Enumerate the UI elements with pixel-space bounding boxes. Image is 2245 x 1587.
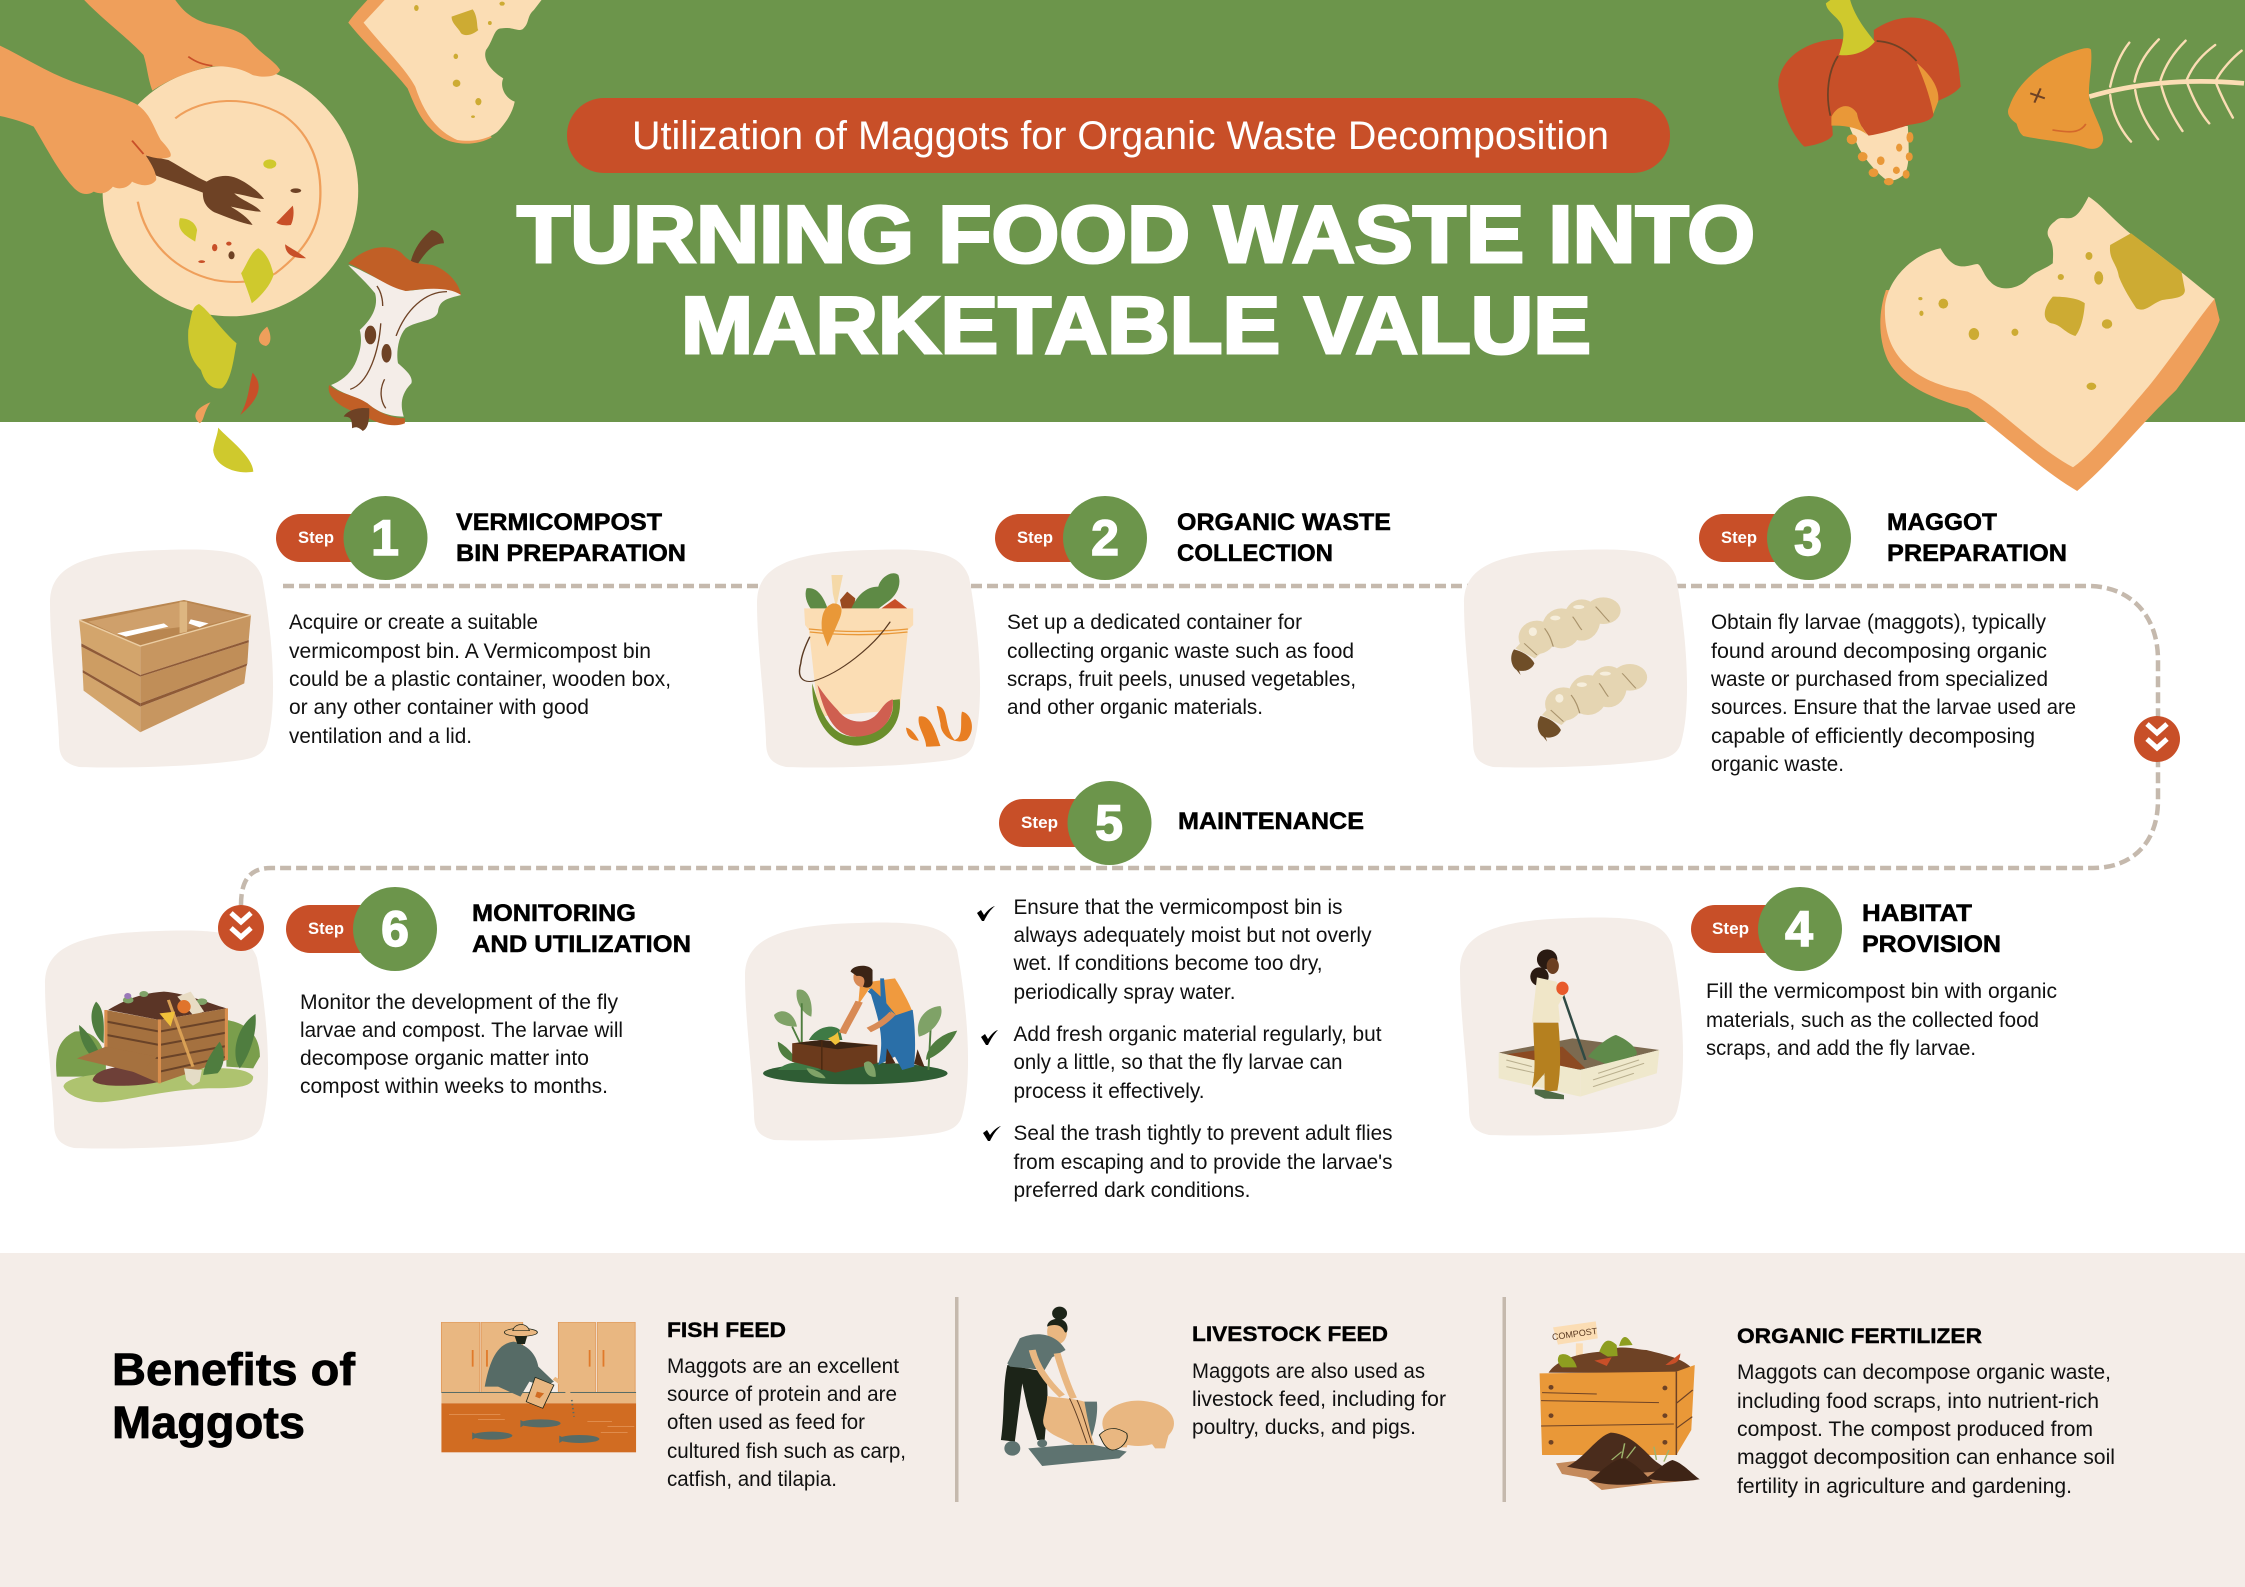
badge: step 4: 4 xyxy=(1785,901,1813,957)
heading: step 6 xyxy=(472,900,691,958)
text: organic fertilizer body: including food scraps, into nutrient-rich xyxy=(1737,1390,2099,1413)
page background band: benefits xyxy=(0,1253,2245,1587)
text: livestock feed body: Maggots are also used as xyxy=(1192,1360,1425,1383)
badge: step 5 xyxy=(999,781,1152,865)
badge: step 3: Step xyxy=(1721,528,1757,547)
panel: step 5 xyxy=(745,781,1392,1202)
heading: step 3: MAGGOT xyxy=(1887,509,1997,536)
text: step 3 body xyxy=(1710,611,2076,776)
heading: step 4 xyxy=(1862,900,2001,958)
text: step 2 body: Set up a dedicated container for xyxy=(1007,611,1302,634)
checklist: step 5: Add fresh organic material regularly, but xyxy=(1014,1023,1382,1046)
icon: check 3 xyxy=(983,1126,1001,1141)
text: step 3 body: capable of efficiently decomposing xyxy=(1711,725,2035,748)
text: step 6 body: decompose organic matter into xyxy=(300,1047,589,1070)
badge: step 3 xyxy=(1699,496,1851,580)
text: fish feed body: source of protein and are xyxy=(667,1383,897,1406)
badge: step 3: 3 xyxy=(1794,510,1822,566)
icon: check 1 xyxy=(977,906,995,921)
text: step 6 body: Monitor the development of the fly xyxy=(300,991,619,1014)
heading: step 4: HABITAT xyxy=(1862,900,1972,927)
panel: fish feed xyxy=(441,1319,906,1491)
icon: man feeding fish xyxy=(441,1322,636,1452)
text: livestock feed body: livestock feed, including for xyxy=(1192,1388,1446,1411)
checklist: step 5: wet. If conditions become too dry, xyxy=(1013,952,1322,975)
text: step 1 body xyxy=(289,611,671,748)
text: step 1 body: Acquire or create a suitable xyxy=(289,611,538,634)
badge: step 1: 1 xyxy=(371,510,399,566)
heading: step 2: ORGANIC WASTE xyxy=(1177,509,1391,536)
badge: step 2: 2 xyxy=(1091,510,1119,566)
heading: step 1 xyxy=(456,509,686,567)
checklist: step 5: preferred dark conditions. xyxy=(1014,1179,1250,1202)
icon: woman with compost bed xyxy=(1499,949,1659,1099)
text: step 2 body xyxy=(1007,611,1356,719)
icon: compost bin in garden xyxy=(56,991,260,1102)
heading: step 4: PROVISION xyxy=(1862,931,2001,958)
illustration: large bitten bread xyxy=(1880,197,2220,491)
heading: step 1: BIN PREPARATION xyxy=(456,540,686,567)
icon: maggots xyxy=(1511,597,1647,742)
chevron: step 3 to 4 xyxy=(2134,716,2180,762)
header band xyxy=(0,0,2245,422)
title xyxy=(517,190,1755,371)
checklist: step 5: periodically spray water. xyxy=(1014,981,1236,1004)
text: step 6 body: larvae and compost. The larvae will xyxy=(300,1019,623,1042)
text: organic fertilizer body: Maggots can decompose organic waste, xyxy=(1737,1361,2111,1384)
text: organic fertilizer body: compost. The compost produced from xyxy=(1737,1418,2093,1441)
illustration: hands holding plate with fork xyxy=(0,0,358,472)
heading: fish feed: FISH FEED xyxy=(667,1319,786,1342)
icon: food waste bucket xyxy=(799,573,972,747)
heading: step 5: MAINTENANCE xyxy=(1178,808,1364,835)
text: fish feed body: Maggots are an excellent xyxy=(667,1355,899,1378)
checklist: step 5: Seal the trash tightly to prevent adult flies xyxy=(1014,1122,1392,1145)
heading: step 3 xyxy=(1887,509,2067,567)
icon: check 2 xyxy=(981,1030,998,1045)
illustration: fish skeleton xyxy=(2008,39,2244,149)
badge: step 5: Step xyxy=(1021,813,1058,832)
title: MARKETABLE VALUE xyxy=(681,281,1591,371)
subtitle pill: Utilization of Maggots for Organic Waste Decomposition xyxy=(632,114,1609,158)
illustration: bitten bread top xyxy=(348,0,542,144)
label: compost sign: COMPOST xyxy=(1551,1326,1598,1342)
badge: step 4 xyxy=(1691,887,1842,971)
panel: step 2 xyxy=(757,496,1391,768)
text: step 4 body: materials, such as the collected food xyxy=(1706,1009,2039,1032)
icon: woman feeding pig xyxy=(1001,1307,1174,1466)
text: step 6 body: compost within weeks to months. xyxy=(300,1075,608,1098)
text: step 4 body: Fill the vermicompost bin with organic xyxy=(1706,980,2057,1003)
text: fish feed body: catfish, and tilapia. xyxy=(667,1468,837,1491)
heading: organic fertilizer: ORGANIC FERTILIZER xyxy=(1737,1325,1982,1348)
heading: benefits xyxy=(112,1344,356,1448)
text: organic fertilizer body xyxy=(1737,1361,2115,1498)
heading: benefits: Maggots xyxy=(112,1397,305,1448)
panel: step 3 xyxy=(1464,496,2076,776)
heading: step 1: VERMICOMPOST xyxy=(456,509,662,536)
badge: step 4: Step xyxy=(1712,919,1749,938)
dashed connector path xyxy=(241,586,2158,905)
badge: step 2: Step xyxy=(1017,528,1053,547)
checklist: step 5: from escaping and to provide the larvae's xyxy=(1014,1151,1392,1174)
badge: step 2 xyxy=(995,496,1147,580)
panel: organic fertilizer xyxy=(1540,1321,2115,1498)
title: TURNING FOOD WASTE INTO xyxy=(517,190,1755,280)
heading: benefits: Benefits of xyxy=(112,1344,356,1395)
heading: step 2 xyxy=(1177,509,1391,567)
heading: step 2: COLLECTION xyxy=(1177,540,1333,567)
panel: step 1 xyxy=(50,496,686,768)
panel: step 4 xyxy=(1460,887,2057,1136)
icon: compost crate with soil xyxy=(1540,1321,1700,1490)
badge: step 6: 6 xyxy=(381,901,409,957)
text: fish feed body xyxy=(667,1355,906,1491)
icon: gardener xyxy=(763,966,957,1084)
text: fish feed body: cultured fish such as carp, xyxy=(667,1440,906,1463)
text: step 1 body: vermicompost bin. A Vermicompost bin xyxy=(289,640,651,663)
text: step 6 body xyxy=(300,991,623,1098)
heading: livestock feed: LIVESTOCK FEED xyxy=(1192,1323,1388,1346)
text: step 2 body: collecting organic waste such as food xyxy=(1007,640,1354,663)
text: step 1 body: could be a plastic container, wooden box, xyxy=(289,668,671,691)
subtitle pill xyxy=(567,98,1670,173)
chevron: step 5 to 6 xyxy=(218,905,264,951)
checklist: step 5: only a little, so that the fly larvae can xyxy=(1014,1051,1342,1074)
badge: step 6 xyxy=(286,887,437,971)
badge: step 1 xyxy=(276,496,428,580)
heading: step 3: PREPARATION xyxy=(1887,540,2067,567)
badge: step 6: Step xyxy=(308,919,344,938)
text: step 2 body: scraps, fruit peels, unused vegetables, xyxy=(1007,668,1356,691)
text: organic fertilizer body: maggot decomposition can enhance soil xyxy=(1737,1446,2115,1469)
text: step 4 body xyxy=(1706,980,2057,1060)
text: step 3 body: organic waste. xyxy=(1711,753,1844,776)
text: fish feed body: often used as feed for xyxy=(667,1411,865,1434)
text: step 3 body: found around decomposing organic xyxy=(1711,640,2047,663)
text: organic fertilizer body: fertility in agriculture and gardening. xyxy=(1737,1475,2072,1498)
panel: step 6 xyxy=(45,887,691,1149)
checklist: step 5: process it effectively. xyxy=(1014,1080,1204,1103)
text: step 3 body: sources. Ensure that the larvae used are xyxy=(1711,696,2076,719)
heading: step 6: MONITORING xyxy=(472,900,636,927)
text: step 1 body: or any other container with good xyxy=(289,696,589,719)
panel: livestock feed xyxy=(1001,1307,1446,1466)
text: step 3 body: Obtain fly larvae (maggots), typically xyxy=(1711,611,2046,634)
checklist: step 5: Ensure that the vermicompost bin is xyxy=(1014,896,1342,919)
icon: wooden crate xyxy=(79,600,251,732)
text: livestock feed body xyxy=(1192,1360,1446,1439)
heading: step 6: AND UTILIZATION xyxy=(472,931,691,958)
text: step 2 body: and other organic materials. xyxy=(1007,696,1263,719)
text: livestock feed body: poultry, ducks, and pigs. xyxy=(1192,1416,1416,1439)
badge: step 1: Step xyxy=(298,528,334,547)
illustration: tomato core xyxy=(1778,0,1961,185)
text: step 4 body: scraps, and add the fly larvae. xyxy=(1706,1037,1976,1060)
badge: step 5: 5 xyxy=(1095,795,1123,851)
checklist: step 5 xyxy=(977,896,1392,1202)
text: step 1 body: ventilation and a lid. xyxy=(289,725,472,748)
text: step 3 body: waste or purchased from specialized xyxy=(1710,668,2048,691)
checklist: step 5: always adequately moist but not overly xyxy=(1014,924,1372,947)
illustration: apple core xyxy=(329,230,461,431)
